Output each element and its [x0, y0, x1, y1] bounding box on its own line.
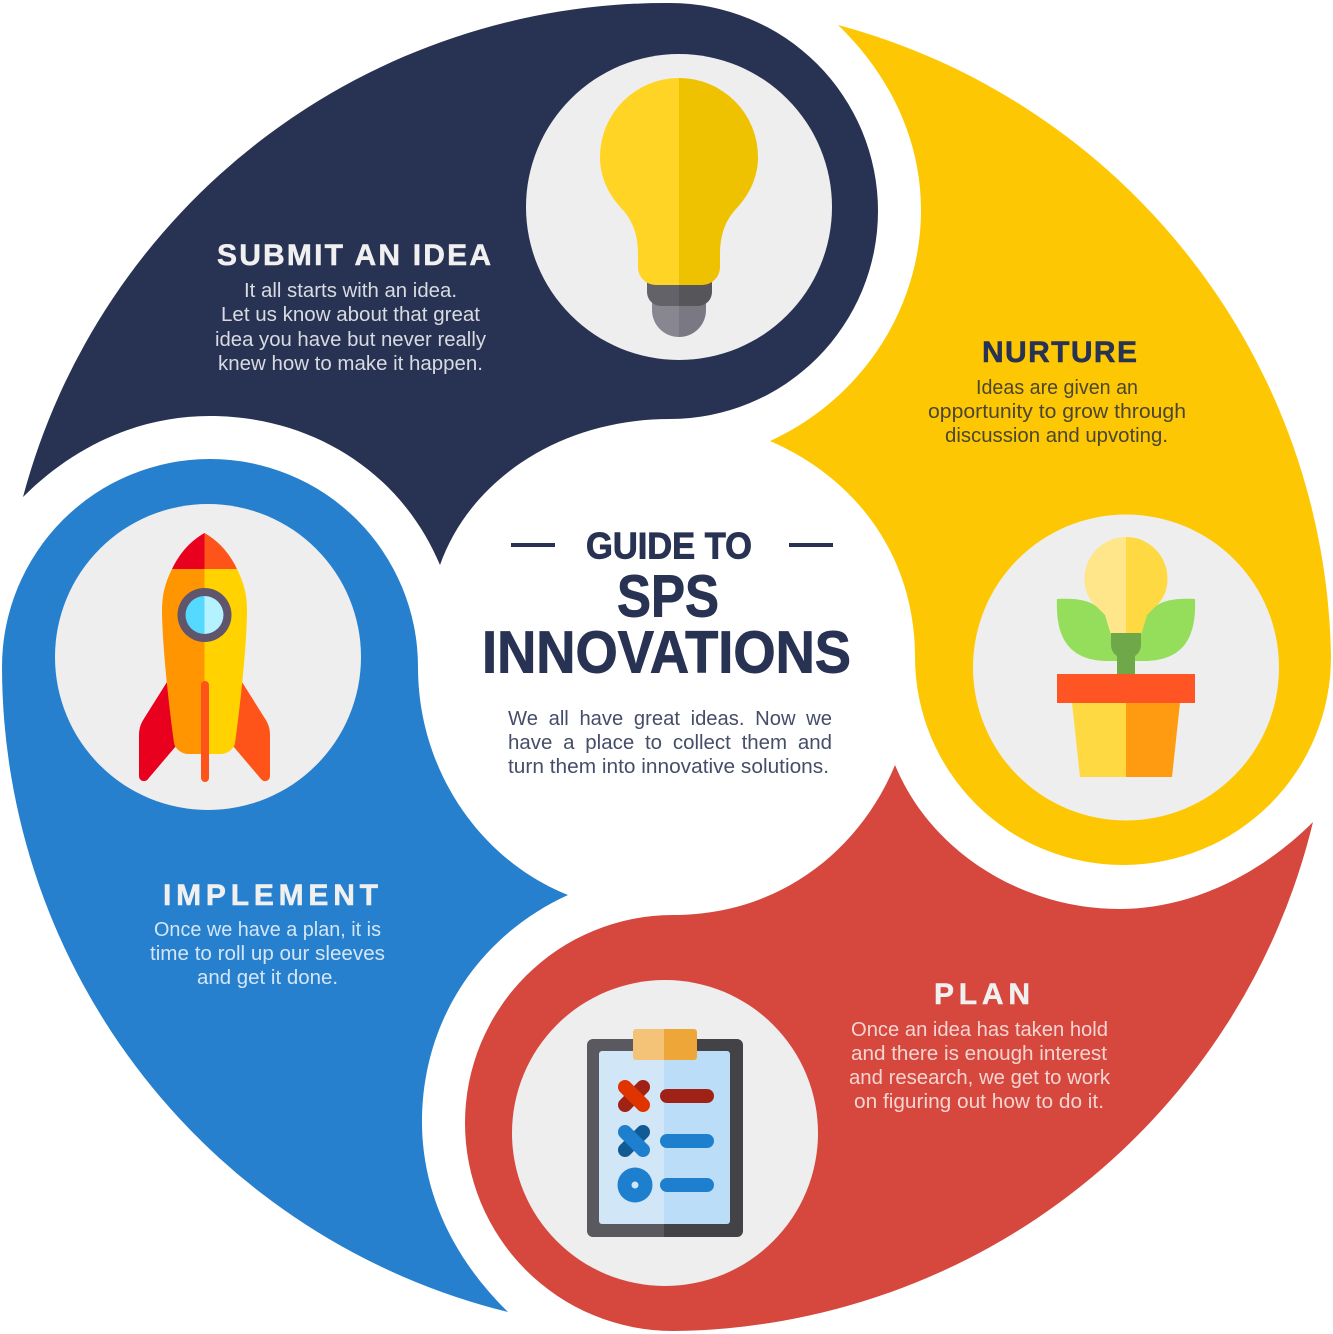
text block: implement: time to roll up our sleeves — [150, 943, 385, 965]
text block: implement — [150, 919, 385, 989]
panel: plan — [465, 765, 1313, 1331]
navy swirl segment — [23, 3, 878, 565]
center title block — [482, 526, 851, 778]
heading: implement: IMPLEMENT — [163, 879, 378, 912]
center description: have a place to collect them and — [508, 732, 832, 754]
title: innovations: INNOVATIONS — [482, 620, 851, 686]
text block: plan: on figuring out how to do it. — [854, 1091, 1104, 1113]
text block: plan: and research, we get to work — [849, 1067, 1111, 1089]
title: guide to: GUIDE TO — [586, 526, 752, 566]
text block: plan: Once an idea has taken hold — [851, 1019, 1108, 1041]
red swirl segment — [465, 765, 1313, 1331]
icon: light bulb — [600, 78, 758, 337]
icon: clipboard checklist — [587, 1029, 743, 1237]
blue swirl segment — [2, 459, 568, 1312]
text block: submit — [215, 280, 486, 375]
panel: nurture — [770, 25, 1331, 865]
center description: We all have great ideas. Now we — [508, 708, 832, 730]
text block: implement: and get it done. — [197, 967, 338, 989]
yellow swirl segment — [770, 25, 1331, 865]
icon circle — [526, 54, 832, 360]
center description: turn them into innovative solutions. — [508, 756, 829, 778]
icon circle — [55, 504, 361, 810]
icon: rocket — [139, 533, 270, 782]
heading: submit an idea: SUBMIT AN IDEA — [217, 239, 491, 272]
text block: nurture: discussion and upvoting. — [945, 425, 1168, 447]
panel: implement — [2, 459, 568, 1312]
title: sps: SPS — [617, 564, 719, 630]
dash right — [789, 543, 833, 547]
text block: plan — [849, 1019, 1111, 1113]
text block: plan: and there is enough interest — [851, 1043, 1107, 1065]
dash left — [511, 543, 555, 547]
text block: nurture — [928, 377, 1186, 447]
heading: plan: PLAN — [934, 978, 1030, 1011]
panel: submit an idea — [23, 3, 878, 565]
text block: submit: knew how to make it happen. — [218, 353, 483, 375]
text block: submit: idea you have but never really — [215, 329, 486, 351]
icon circle — [512, 980, 818, 1286]
icon: plant with bulb — [1057, 537, 1195, 777]
text block: submit: Let us know about that great — [221, 304, 480, 326]
heading: nurture: NURTURE — [982, 336, 1137, 369]
text block: submit: It all starts with an idea. — [244, 280, 457, 302]
text block: nurture: Ideas are given an — [976, 377, 1138, 399]
text block: implement: Once we have a plan, it is — [154, 919, 381, 941]
center description — [508, 708, 832, 778]
icon circle — [973, 514, 1279, 820]
text block: nurture: opportunity to grow through — [928, 401, 1186, 423]
